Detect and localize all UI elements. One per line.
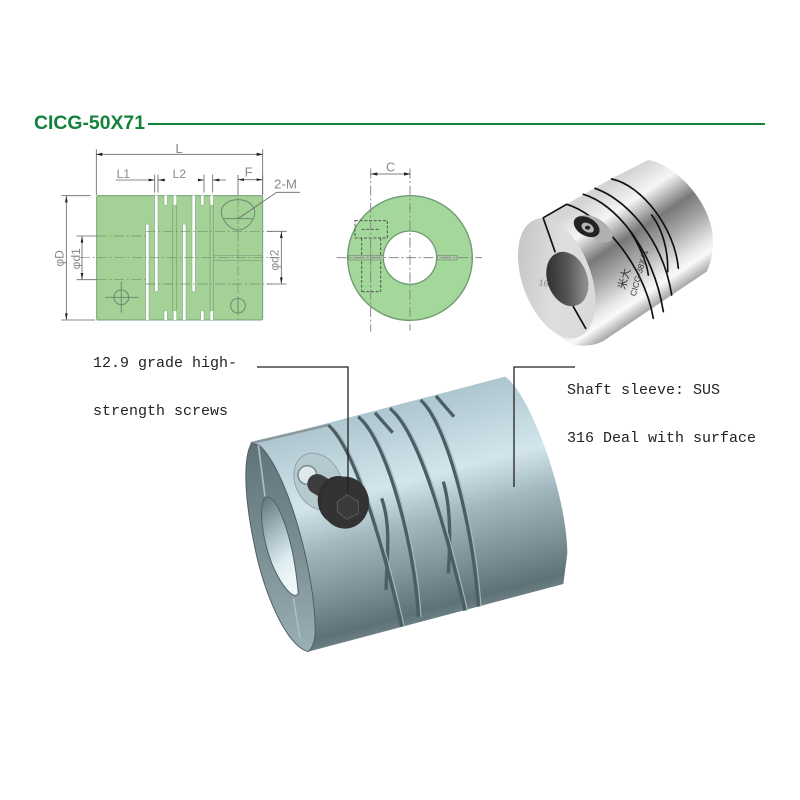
- photo grooves: [543, 179, 678, 328]
- slits: [146, 195, 213, 321]
- photo engraving: [538, 248, 650, 297]
- dimension labels: 2-M: [274, 177, 297, 192]
- top seam: [251, 425, 328, 443]
- photo body: [520, 160, 713, 346]
- photo engraving: 米大: [615, 266, 634, 291]
- callout text: screws: [93, 355, 237, 420]
- end view centre lines: [337, 168, 482, 332]
- dimension lines: [61, 149, 300, 320]
- screw recess: [284, 445, 352, 519]
- dimension labels: φd1: [69, 248, 83, 269]
- photo engraving: 16: [538, 277, 549, 289]
- photo screw: [570, 212, 613, 242]
- end view technical drawing: [337, 160, 482, 332]
- end face: [246, 443, 315, 652]
- centre lines: [80, 197, 280, 320]
- callout text: shaft sleeve: [567, 382, 756, 447]
- callout line: shaft sleeve: [514, 367, 575, 487]
- photo engraving: CICG-38X41: [628, 248, 650, 297]
- callout text: screws: strength screws: [93, 403, 228, 420]
- side view technical drawing: [52, 141, 300, 321]
- arrowheads: [65, 153, 283, 320]
- dimension labels: L: [175, 141, 183, 156]
- end view ring: [348, 196, 472, 320]
- inner lines: [173, 205, 263, 311]
- product photo: metal coupling: [503, 160, 713, 349]
- end view slots: [349, 255, 457, 260]
- dimension labels: F: [245, 165, 253, 180]
- dimension labels: L1: [117, 167, 130, 181]
- callout line: screws: [257, 367, 348, 493]
- face slits: [258, 445, 300, 638]
- C dimension: C: [386, 160, 395, 174]
- callout text: shaft sleeve: Shaft sleeve: SUS: [567, 382, 720, 399]
- callout: screws: [93, 355, 348, 493]
- title: CICG-50X71: [34, 112, 145, 134]
- C dimension: [371, 160, 411, 176]
- bore: [262, 497, 298, 595]
- dimension labels: φd2: [267, 249, 281, 271]
- dimension labels: L2: [173, 167, 186, 181]
- dimension labels: φD: [52, 250, 66, 267]
- photo end face: [503, 208, 610, 349]
- threaded hole top: [105, 200, 255, 313]
- screw head: [318, 476, 369, 529]
- dimension labels: [52, 141, 297, 271]
- screw shank: [317, 484, 333, 493]
- hidden screw outline: [355, 221, 387, 292]
- callout text: screws: 12.9 grade high-: [93, 355, 237, 372]
- groove highlights: [331, 400, 481, 627]
- callout: shaft sleeve: [514, 367, 756, 487]
- drawing body: [97, 196, 263, 320]
- grooves: [328, 396, 478, 627]
- photo bore: [539, 246, 596, 312]
- coupling body: [246, 377, 567, 652]
- callout text: shaft sleeve: 316 Deal with surface: [567, 430, 756, 447]
- title rule: [148, 123, 765, 125]
- screw hole: [298, 466, 317, 484]
- main 3D coupling: [246, 377, 567, 652]
